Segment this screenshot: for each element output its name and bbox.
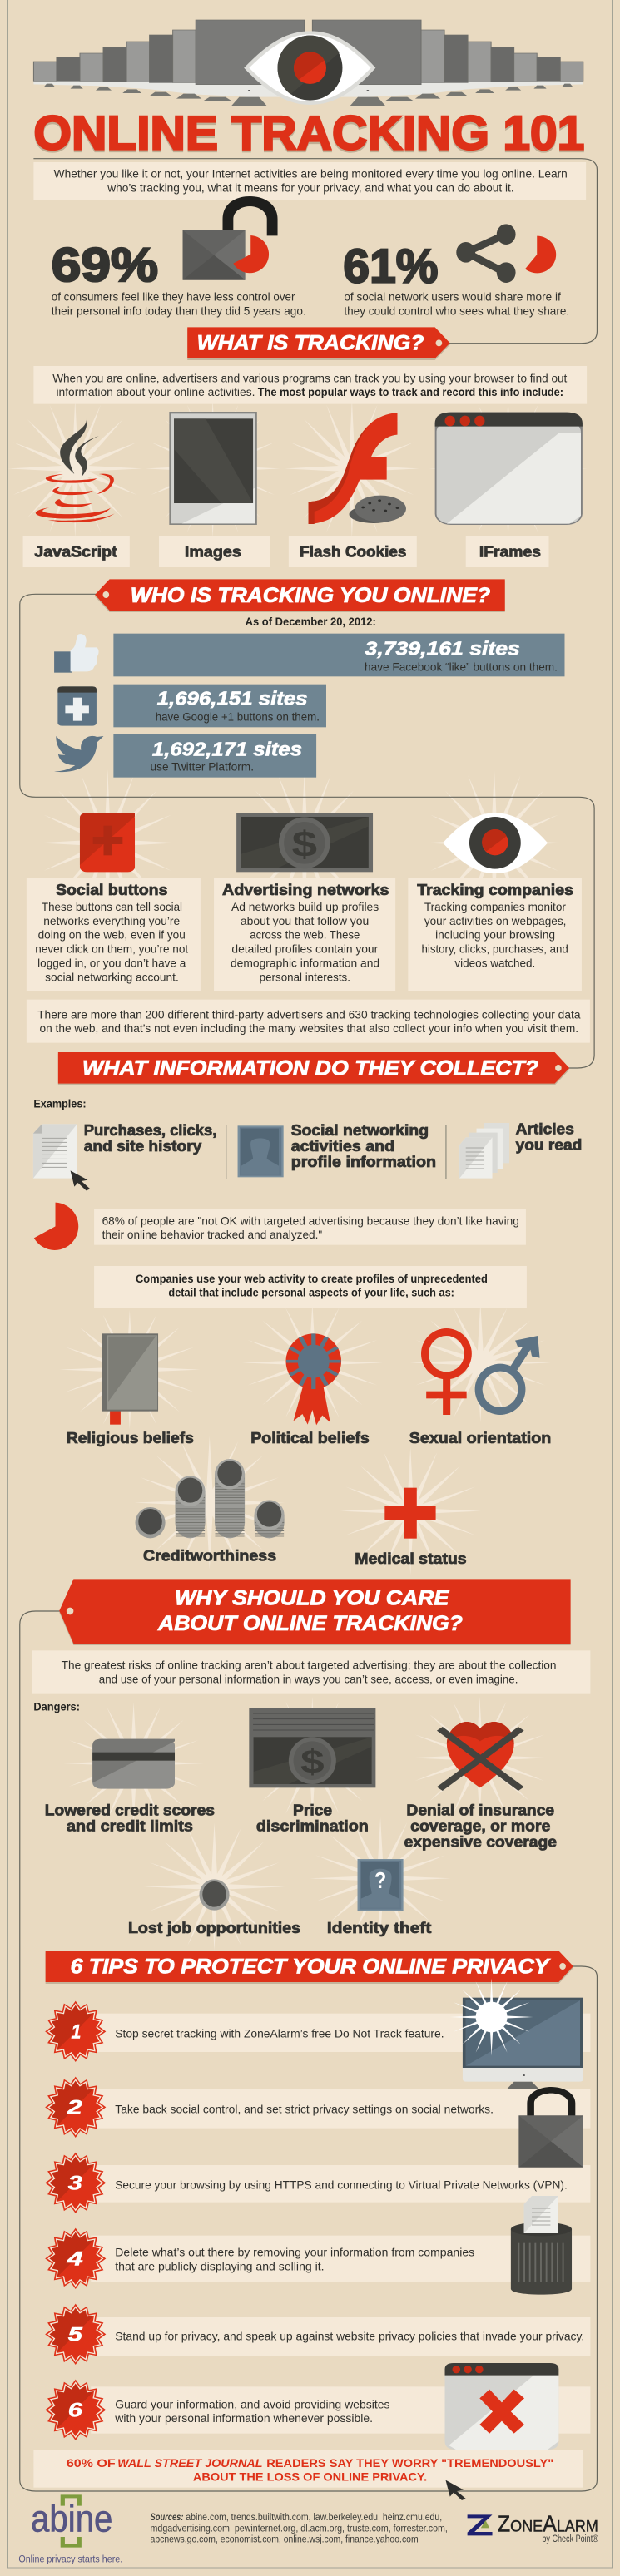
tip 5	[45, 2304, 590, 2365]
icon: iframe browser window	[435, 413, 583, 525]
panel: advertising networks: about you that follow you	[241, 914, 369, 927]
tip 3: 3	[68, 2173, 82, 2194]
icon: trash can with paper	[511, 2196, 572, 2295]
label: Flash Cookies: Flash Cookies	[300, 543, 406, 560]
callout: Wall Street Journal stat	[33, 2450, 583, 2488]
section: dangers and tips	[45, 1708, 590, 2203]
label: denial of insurance: coverage, or more	[410, 1817, 550, 1834]
label: creditworthiness: Creditworthiness	[143, 1547, 276, 1565]
section: personal aspects and why care	[32, 1328, 590, 1713]
section tag: why should you care: ABOUT ONLINE TRACKING?	[157, 1611, 463, 1635]
panel: advertising networks: Advertising networks	[222, 882, 389, 898]
icon: dollar bill: $	[292, 825, 317, 865]
section: tips continued and footer	[18, 2153, 598, 2565]
sources: Sources:	[151, 2512, 184, 2523]
tip 1	[45, 2001, 590, 2062]
icon: Google plus one	[57, 686, 97, 726]
example: purchases: Purchases, clicks,	[84, 1122, 216, 1139]
tip 1: Stop secret tracking with ZoneAlarm’s free Do Not Track feature.	[115, 2026, 444, 2040]
pie chart: 68%	[34, 1203, 78, 1250]
label: IFrames	[466, 536, 548, 567]
sources: mdgadvertising.com, pewinternet.org, dl.acm.org, truste.com, forrester.com,	[151, 2524, 448, 2534]
stat: 61% social network users: 61%	[343, 239, 438, 293]
stat: 69% consumers	[52, 238, 306, 318]
panel: companies profiles: detail that include personal aspects of your life, such as:	[168, 1286, 454, 1299]
label: identity theft: Identity theft	[327, 1920, 432, 1936]
icon: profile silhouette	[238, 1125, 284, 1177]
panel: advertising networks: personal interests.	[260, 970, 350, 984]
section tag: who is tracking you online: WHO IS TRACKING YOU ONLINE?	[131, 583, 490, 607]
tip 4: that are publicly displaying and selling it.	[115, 2259, 325, 2273]
tip 6: with your personal information whenever possible.	[114, 2411, 373, 2425]
label: price discrimination	[256, 1802, 369, 1834]
icon: dollar bill	[236, 813, 373, 872]
section tag: what information do they collect	[58, 1052, 569, 1085]
icon: thumbs up	[54, 634, 99, 673]
tip 2: 2	[67, 2097, 82, 2119]
background starbursts	[8, 399, 588, 1951]
label: price discrimination: Price	[293, 1802, 332, 1818]
panel: advertising networks	[214, 878, 395, 991]
icon: stack of bills: $	[300, 1743, 325, 1781]
bar: Facebook	[113, 634, 564, 676]
date note: As of December 20, 2012:	[246, 615, 376, 628]
icon: image frame	[169, 412, 257, 525]
section tag: what is tracking: WHAT IS TRACKING?	[197, 331, 424, 354]
label: Images: Images	[185, 543, 241, 560]
example: articles: you read	[516, 1136, 582, 1154]
sources: abcnews.go.com, economist.com, online.wsj.com, finance.yahoo.com	[151, 2534, 419, 2545]
label: political beliefs: Political beliefs	[250, 1430, 370, 1446]
icon: stack of articles	[459, 1123, 509, 1179]
bar: Facebook: 3,739,161 sites	[365, 638, 520, 660]
icon: crossed-out heart	[439, 1722, 521, 1789]
panel: social buttons: Social buttons	[56, 882, 167, 898]
icon: share symbol with pie	[456, 224, 556, 283]
examples label: Examples:	[33, 1097, 87, 1110]
panel: social buttons: never click on them, you’re not	[35, 942, 188, 956]
example: articles	[516, 1120, 582, 1154]
label: denial of insurance: Denial of insurance	[406, 1802, 554, 1818]
panel: social buttons: logged in, or you don’t have a	[37, 956, 186, 970]
tip 4: 4	[67, 2248, 83, 2270]
tip 2	[45, 2077, 590, 2138]
label: lowered credit scores	[45, 1802, 215, 1834]
tip 6: 6	[68, 2400, 82, 2421]
icon: medical cross	[384, 1488, 436, 1539]
panel: third-party advertisers	[27, 1000, 590, 1043]
label: denial of insurance: expensive coverage	[404, 1833, 557, 1850]
label: IFrames: IFrames	[479, 543, 541, 560]
panel: advertising networks: across the web. These	[250, 928, 360, 942]
logo: abine	[18, 2494, 122, 2565]
tip 1: 1	[72, 2021, 81, 2043]
panel: advertising networks: demographic information and	[231, 956, 379, 970]
label: medical status: Medical status	[355, 1550, 467, 1567]
label: Images	[159, 536, 270, 567]
panel: 68% of people: their online behavior tracked and analyzed."	[102, 1228, 322, 1241]
section: header and intro	[33, 20, 587, 404]
logo: abine: abine	[31, 2498, 112, 2539]
tip 3	[45, 2153, 568, 2213]
stat: 69% consumers: 69%	[52, 238, 158, 291]
example: purchases: and site history	[84, 1138, 202, 1155]
panel: tracking companies	[408, 878, 582, 991]
label: lost job opportunities: Lost job opportunities	[128, 1920, 300, 1936]
icon: smashed monitor	[450, 1978, 583, 2092]
panel: companies profiles	[94, 1266, 527, 1308]
section tag: six tips	[46, 1951, 573, 1984]
icon: book	[102, 1333, 158, 1425]
panel: advertising networks: detailed profiles contain your	[231, 942, 378, 956]
icon: coin stacks	[135, 1459, 285, 1538]
panel: greatest risks	[32, 1650, 590, 1694]
icon: cursor	[445, 2480, 466, 2500]
panel: social buttons: networks everything you’re	[43, 914, 180, 927]
icon: document with cursor	[33, 1124, 90, 1190]
label: denial of insurance	[404, 1802, 557, 1850]
section tag: who is tracking you online	[95, 579, 505, 612]
icon: browser window with red X	[445, 2363, 558, 2450]
example: social networking: profile information	[291, 1154, 436, 1170]
tip 4	[45, 2228, 590, 2289]
icon: Twitter bird	[54, 736, 103, 772]
label: religious beliefs: Religious beliefs	[67, 1430, 194, 1446]
panel: tracking companies: including your browsing	[435, 928, 555, 942]
example: social networking	[291, 1122, 436, 1170]
icon: single coin	[199, 1879, 230, 1911]
icon: social button	[80, 813, 135, 872]
tip 5: 5	[68, 2324, 82, 2346]
icon: open padlock with pie	[183, 196, 278, 280]
label: JavaScript	[23, 536, 130, 567]
example: purchases	[84, 1122, 216, 1155]
icon: row of monitors with eye	[33, 20, 583, 106]
section tag: what is tracking	[187, 327, 450, 360]
stat: 61% social network users	[343, 239, 569, 318]
bar: Google plus: have Google +1 buttons on them.	[156, 710, 320, 724]
tip 6	[45, 2380, 590, 2440]
bar: Twitter	[113, 734, 316, 778]
example: articles: Articles	[516, 1120, 574, 1138]
panel: tracking explanation	[33, 366, 587, 404]
example: social networking: activities and	[291, 1138, 394, 1155]
label: sexual orientation: Sexual orientation	[409, 1430, 551, 1446]
panel: tracking companies: Tracking companies	[417, 882, 573, 898]
section: trackers and collected information	[27, 878, 590, 1308]
panel: 68% of people	[94, 1209, 526, 1245]
bar: Twitter: use Twitter Platform.	[151, 760, 254, 774]
stat: 69% consumers: of consumers feel like they have less control over	[52, 290, 295, 304]
icon: credit card	[92, 1739, 175, 1789]
icon: java cup	[36, 418, 115, 522]
panel: tracking explanation: information about your online activities.	[56, 385, 255, 398]
icon: rosette	[286, 1333, 341, 1425]
callout: Wall Street Journal stat: WALL STREET JOURNAL	[117, 2456, 262, 2470]
icon: gender symbols	[421, 1328, 540, 1415]
tip 3 panel background	[91, 2165, 590, 2203]
panel: social buttons	[27, 878, 201, 991]
label: lowered credit scores: and credit limits	[67, 1817, 193, 1834]
icon: flash logo and cookies	[309, 413, 406, 524]
tip 4: Delete what’s out there by removing your information from companies	[115, 2246, 474, 2259]
callout: Wall Street Journal stat: ABOUT THE LOSS OF ONLINE PRIVACY.	[193, 2470, 427, 2484]
icon: stack of bills	[249, 1708, 375, 1787]
example: social networking: Social networking	[291, 1122, 429, 1139]
sources	[151, 2512, 448, 2545]
section tag: why should you care: WHY SHOULD YOU CARE	[175, 1586, 449, 1609]
section: tracking methods and who tracks	[23, 412, 583, 873]
label: lowered credit scores: Lowered credit scores	[45, 1802, 215, 1818]
bar: Twitter: 1,692,171 sites	[152, 739, 302, 760]
panel: social buttons: These buttons can tell social	[42, 900, 182, 913]
tip 6: Guard your information, and avoid providing websites	[115, 2397, 389, 2411]
dangers label: Dangers:	[33, 1700, 80, 1713]
icon: locked padlock	[518, 2087, 583, 2168]
panel: advertising networks: Ad networks build up profiles	[231, 900, 379, 913]
sources: abine.com, trends.builtwith.com, law.berkeley.edu, heinz.cmu.edu,	[186, 2512, 442, 2523]
stat: 69% consumers: their personal info today than they did 5 years ago.	[52, 304, 306, 318]
section tag: why should you care	[59, 1579, 571, 1645]
panel: tracking companies: videos watched.	[454, 956, 535, 970]
panel: intro text	[33, 162, 586, 200]
bar: Google plus: 1,696,151 sites	[157, 688, 308, 710]
panel: social buttons: social networking account.	[45, 970, 179, 984]
label: Flash Cookies	[289, 536, 417, 567]
label: price discrimination: discrimination	[256, 1817, 369, 1834]
icon: unknown identity: ?	[374, 1868, 386, 1893]
logo: ZoneAlarm	[468, 2512, 598, 2544]
callout: Wall Street Journal stat: 60% OF	[67, 2456, 116, 2470]
icon: unknown identity	[358, 1859, 404, 1911]
panel: social buttons: doing on the web, even if you	[38, 928, 186, 942]
label: JavaScript: JavaScript	[34, 543, 117, 560]
logo: abine: Online privacy starts here.	[18, 2554, 122, 2565]
icon: tracking eye	[443, 813, 548, 873]
bar: Google plus	[113, 685, 326, 727]
